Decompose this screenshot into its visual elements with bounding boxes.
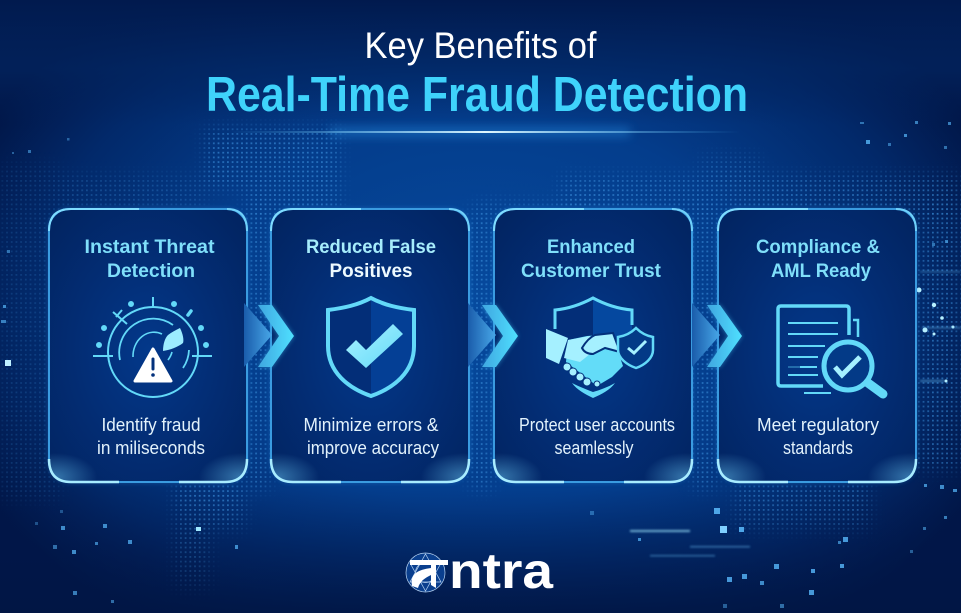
heading: Positives [330,261,412,282]
body text: in miliseconds [97,438,205,458]
icon: document with magnifier [778,306,883,394]
logo wordmark: ntra [449,543,554,599]
heading: Instant Threat [84,237,215,258]
background light particles [1,121,957,608]
body text: standards [783,438,853,458]
body text: seamlessly [554,438,634,458]
heading: Customer Trust [521,261,662,282]
panel: compliance and AML ready [682,209,952,501]
arrow 1 [244,303,294,367]
panel: instant threat detection [13,209,283,501]
logo glyph [410,560,448,588]
background light streaks [630,271,961,556]
heading: Compliance & [756,237,880,258]
background bright sparks [916,288,954,382]
logo emblem [406,553,445,592]
icon: handshake and shield [546,298,653,398]
divider glow [230,128,740,136]
arrow 3 [692,303,742,367]
panel: enhanced customer trust [458,209,728,501]
body text: Protect user accounts [519,415,675,435]
heading: AML Ready [771,261,871,282]
panel: reduced false positives [235,209,505,501]
body text: Meet regulatory [757,415,879,435]
icon: radar with warning [93,297,212,397]
body text: improve accuracy [307,438,439,458]
heading: Enhanced [547,237,635,258]
logo [406,543,554,599]
arrow 2 [468,303,518,367]
body text: Identify fraud [102,415,200,435]
title [206,25,748,122]
title line 1: Key Benefits of [364,25,597,66]
heading: Detection [107,261,195,282]
title line 2: Real-Time Fraud Detection [206,68,748,122]
heading: Reduced False [306,237,436,258]
body text: Minimize errors & [304,415,438,435]
icon: shield with check [328,298,414,396]
